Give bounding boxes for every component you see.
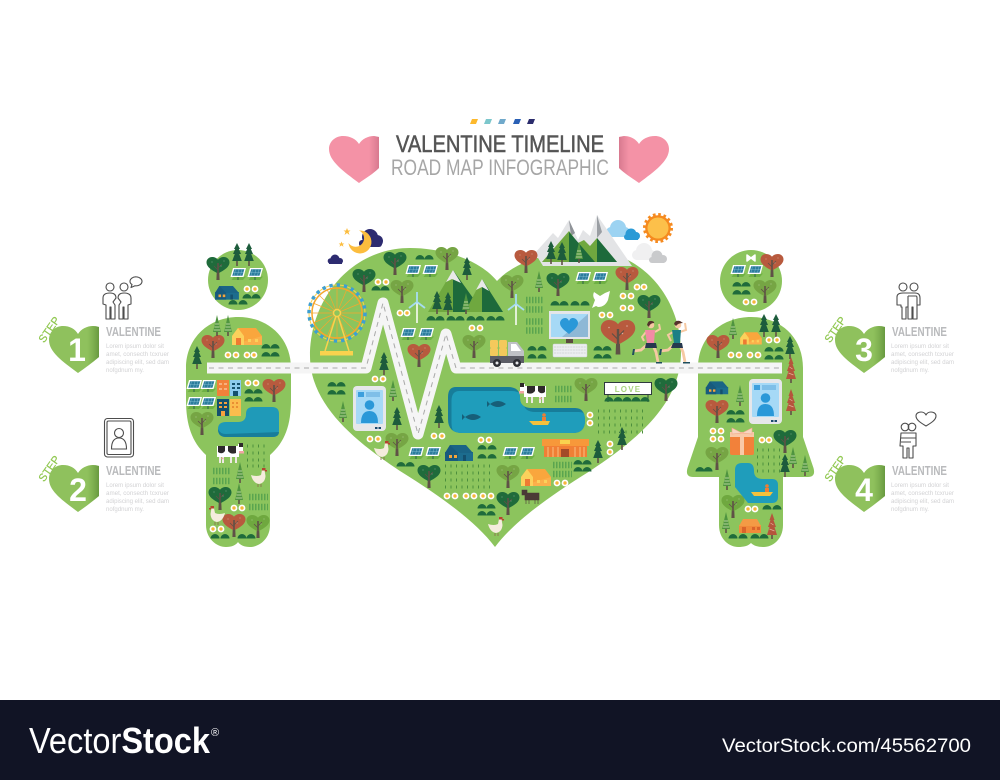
step 2 body text bbox=[106, 482, 170, 513]
step 4 body text bbox=[891, 482, 955, 513]
daisy flowers bbox=[210, 279, 780, 532]
step 3 body text bbox=[891, 343, 955, 374]
step 3 heart bbox=[835, 326, 885, 373]
step 1 body text: adipiscing elit, sed dam bbox=[106, 359, 169, 366]
step 2 heart bbox=[49, 465, 99, 512]
step 3 heading: VALENTINE bbox=[892, 325, 947, 339]
icon: couple embracing bbox=[897, 283, 920, 319]
wind turbines bbox=[409, 292, 524, 325]
footer registered mark: ® bbox=[211, 727, 219, 739]
step 1 label: STEP bbox=[37, 315, 63, 345]
step 4 body text: nofgdnum my. bbox=[891, 506, 929, 513]
person left: body bbox=[186, 317, 291, 547]
subtitle: ROAD MAP INFOGRAPHIC bbox=[391, 155, 609, 180]
step 1 body text: Lorem ipsum dolor sit bbox=[106, 343, 164, 350]
title: VALENTINE TIMELINE bbox=[396, 131, 604, 158]
step 2 heading: VALENTINE bbox=[106, 464, 161, 478]
solar panels bbox=[186, 265, 763, 459]
love billboard bbox=[604, 382, 652, 402]
night sky: moon, stars and clouds bbox=[328, 228, 383, 264]
icon: hugging couple with heart bbox=[900, 412, 936, 458]
person right: head bbox=[720, 250, 782, 312]
animals bbox=[209, 383, 546, 536]
step 3 body text: nofgdnum my. bbox=[891, 367, 929, 374]
heartbeat road bbox=[207, 303, 782, 434]
person left: head bbox=[208, 250, 268, 310]
title right heart bbox=[619, 136, 669, 183]
step 1 body text: amet, consecth tcxruer bbox=[106, 351, 170, 358]
step 3 number: 3 bbox=[855, 332, 873, 368]
step 2 body text: amet, consecth tcxruer bbox=[106, 490, 170, 497]
step 1 heading: VALENTINE bbox=[106, 325, 161, 339]
step 4 number: 4 bbox=[855, 472, 873, 508]
white dove bbox=[592, 291, 610, 308]
apartment buildings bbox=[217, 380, 241, 416]
heart trees bbox=[190, 247, 796, 538]
pond: right figure with boat bbox=[735, 463, 778, 503]
houses bbox=[215, 286, 762, 533]
step 2 panel bbox=[37, 418, 170, 513]
person right: body bbox=[687, 317, 814, 547]
footer logo: VectorStock bbox=[29, 720, 211, 761]
step 2 body text: nofgdnum my. bbox=[106, 506, 144, 513]
step 4 body text: Lorem ipsum dolor sit bbox=[891, 482, 949, 489]
step 4 body text: adipiscing elit, sed dam bbox=[891, 498, 954, 505]
step 3 panel bbox=[823, 283, 955, 374]
ferris wheel bbox=[309, 285, 365, 356]
step 2 body text: adipiscing elit, sed dam bbox=[106, 498, 169, 505]
title left heart bbox=[329, 136, 379, 183]
step 4 heart bbox=[835, 465, 885, 512]
step 3 body text: amet, consecth tcxruer bbox=[891, 351, 955, 358]
step 3 label: STEP bbox=[823, 315, 849, 345]
gift box bbox=[730, 428, 754, 455]
step 4 panel bbox=[823, 412, 955, 513]
phones bbox=[353, 379, 782, 431]
footer url: VectorStock.com/45562700 bbox=[722, 736, 971, 757]
pine trees bbox=[192, 243, 809, 539]
icon: couple talking bbox=[103, 277, 142, 319]
heart land bbox=[310, 248, 681, 547]
love billboard: LOVE bbox=[615, 385, 641, 394]
market building bbox=[542, 439, 589, 457]
step 1 heart bbox=[49, 326, 99, 373]
step 1 number: 1 bbox=[68, 332, 86, 368]
computer with blue heart bbox=[549, 311, 590, 357]
mountains behind heart bbox=[535, 215, 632, 266]
pond: left figure bbox=[218, 407, 279, 437]
step 4 heading: VALENTINE bbox=[892, 464, 947, 478]
step 2 number: 2 bbox=[69, 472, 87, 508]
hay truck bbox=[490, 340, 524, 367]
crop fields bbox=[213, 300, 781, 507]
step 3 body text: adipiscing elit, sed dam bbox=[891, 359, 954, 366]
step 4 body text: amet, consecth tcxruer bbox=[891, 490, 955, 497]
step 2 body text: Lorem ipsum dolor sit bbox=[106, 482, 164, 489]
step 1 panel bbox=[37, 277, 170, 374]
small mountains in heart bbox=[428, 270, 503, 315]
day sky: sun and clouds bbox=[606, 214, 672, 263]
step 1 body text bbox=[106, 343, 170, 374]
step 3 body text: Lorem ipsum dolor sit bbox=[891, 343, 949, 350]
icon: portrait frame bbox=[104, 418, 134, 457]
bushes bbox=[210, 255, 784, 538]
step 2 label: STEP bbox=[37, 454, 63, 484]
footer bar bbox=[0, 700, 1000, 780]
butterfly bbox=[747, 255, 755, 261]
pond: heart with fish and boat bbox=[448, 387, 585, 433]
step 4 label: STEP bbox=[823, 454, 849, 484]
runners bbox=[632, 321, 690, 364]
colour swatches bbox=[470, 119, 535, 124]
step 1 body text: nofgdnum my. bbox=[106, 367, 144, 374]
